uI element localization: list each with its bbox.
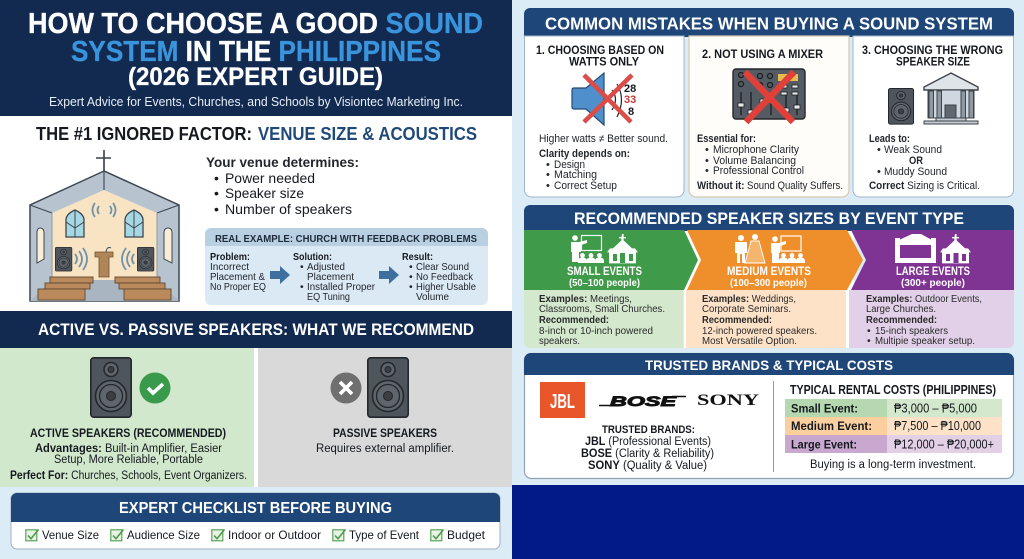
mistake 1 text: Matching xyxy=(554,169,597,181)
active speakers text: Advantages: Built-in Amplifier, Easier xyxy=(35,443,222,455)
example: result: Higher Usable xyxy=(416,281,476,293)
text block: venue determines: Power needed xyxy=(225,170,315,186)
icon: crossed-out loudspeaker: 33 xyxy=(624,94,636,106)
mistake 2 text: Without it: Sound Quality Suffers. xyxy=(697,180,843,192)
panel: title banner xyxy=(0,0,512,116)
table: typical rental costs: ₱7,500 – ₱10,000 xyxy=(894,419,981,433)
icon: crossed-out loudspeaker xyxy=(572,73,636,125)
active speakers text: ACTIVE SPEAKERS (RECOMMENDED) xyxy=(30,426,226,440)
text block: venue determines: • xyxy=(214,201,219,217)
mistake 2 text: • xyxy=(705,165,709,177)
mistake 1 text: Design xyxy=(554,159,585,171)
heading: recommended sizes: RECOMMENDED SPEAKER SIZES BY EVENT TYPE xyxy=(574,209,964,228)
icon: wedding couple and seminar xyxy=(735,234,805,263)
table: typical rental costs: ₱12,000 – ₱20,000+ xyxy=(894,438,994,452)
card: mistake 3 xyxy=(853,36,1014,197)
mistake 2 text: • xyxy=(705,155,709,167)
mistake 1 text: Clarity depends on: xyxy=(539,148,630,160)
large events text xyxy=(866,293,982,347)
text block: trusted brands list: SONY (Quality & Value) xyxy=(588,460,707,472)
example: problem: Incorrect xyxy=(210,261,249,273)
card: mistake 3: SPEAKER SIZE xyxy=(896,54,970,68)
example: result: • xyxy=(409,271,413,283)
table: typical rental costs: Large Event: xyxy=(791,438,857,452)
icon: church interior xyxy=(30,150,179,301)
example: result: • xyxy=(409,261,413,273)
checklist items: Indoor or Outdoor xyxy=(228,528,321,542)
large events text: 15-inch speakers xyxy=(875,325,948,337)
mistake 3 text: • xyxy=(877,166,881,178)
example: problem: Placement & xyxy=(210,271,265,283)
column: large events xyxy=(849,230,1014,348)
panel: active speakers xyxy=(0,348,254,487)
table: typical rental costs xyxy=(785,383,1002,471)
example: result: • xyxy=(409,281,413,293)
icon: check mark xyxy=(140,372,170,404)
large events text: Recommended: xyxy=(866,314,937,326)
large events text: • xyxy=(867,325,871,337)
logo: BOSE: BOSE xyxy=(610,393,677,409)
mistake 3 text: Leads to: xyxy=(869,133,910,145)
mistake 1 text: • xyxy=(546,159,550,171)
panel: venue size and acoustics xyxy=(30,124,488,305)
table: typical rental costs: Small Event: xyxy=(791,402,858,416)
medium events text: Recommended: xyxy=(702,314,772,326)
mistake 1 text xyxy=(539,133,668,192)
card: mistake 2: 2. NOT USING A MIXER xyxy=(702,47,823,61)
large events text: • xyxy=(867,335,871,347)
checklist items: Venue Size xyxy=(42,528,99,542)
mistake 2 text: Essential for: xyxy=(697,133,756,145)
mistake 1 text: Correct Setup xyxy=(554,180,617,192)
column: small events xyxy=(524,230,698,348)
icon: active speaker xyxy=(91,358,131,417)
checklist items: Type of Event xyxy=(349,528,420,542)
mistake 2 text: Microphone Clarity xyxy=(713,144,799,156)
small events text: Recommended: xyxy=(539,314,609,326)
mistake 1 text: • xyxy=(546,169,550,181)
text block: venue determines: Your venue determines: xyxy=(206,155,359,170)
table: typical rental costs: Buying is a long-term investment. xyxy=(810,459,976,471)
mistake 3 text: Weak Sound xyxy=(884,144,942,156)
medium events text: Most Versatile Option. xyxy=(702,335,797,347)
right column background xyxy=(512,0,1024,485)
small events text: Classrooms, Small Churches. xyxy=(539,303,665,315)
column: large events: (300+ people) xyxy=(901,277,965,289)
column: large events: LARGE EVENTS xyxy=(896,266,970,278)
medium events text xyxy=(702,293,817,347)
panel: recommended speaker sizes xyxy=(524,205,1014,348)
column: medium events xyxy=(686,230,863,348)
passive speakers text: PASSIVE SPEAKERS xyxy=(333,426,437,440)
heading: ignored factor xyxy=(36,124,477,144)
passive speakers text: Requires external amplifier. xyxy=(316,443,454,455)
mistake 2 text: Volume Balancing xyxy=(713,155,796,167)
title line 2: SYSTEM IN THE PHILIPPINES xyxy=(71,36,441,68)
example: result: Clear Sound xyxy=(416,261,469,273)
card: mistake 1: 1. CHOOSING BASED ON xyxy=(536,43,664,57)
mistake 3 text: Correct Sizing is Critical. xyxy=(869,180,980,192)
small events text: Examples: Meetings, xyxy=(539,293,632,305)
example: solution: EQ Tuning xyxy=(307,291,350,303)
card: mistake 3: 3. CHOOSING THE WRONG xyxy=(862,43,1003,57)
large events text: Large Churches. xyxy=(866,303,936,315)
panel: trusted brands and costs xyxy=(524,353,1014,478)
text block: trusted brands list xyxy=(581,424,714,472)
example: problem xyxy=(210,251,266,293)
navy footer block xyxy=(512,485,1024,559)
example: solution: Solution: xyxy=(293,251,332,263)
logo: SONY: SONY xyxy=(697,392,759,409)
column: small events: SMALL EVENTS xyxy=(567,266,642,278)
subtitle: Expert Advice for Events, Churches, and Schools by Visiontec Marketing Inc. xyxy=(49,95,463,109)
heading: active vs passive: ACTIVE VS. PASSIVE SPEAKERS: WHAT WE RECOMMEND xyxy=(38,321,474,339)
table: typical rental costs: Medium Event: xyxy=(791,419,872,433)
column: medium events: (100–300 people) xyxy=(730,277,807,289)
arrow: problem to solution xyxy=(270,266,290,284)
medium events text: Corporate Seminars. xyxy=(702,303,791,315)
example: result xyxy=(402,251,476,303)
table: typical rental costs: ₱3,000 – ₱5,000 xyxy=(894,402,977,416)
text block: venue determines: • xyxy=(214,185,219,201)
mistake 3 text: • xyxy=(877,144,881,156)
example: result: No Feedback xyxy=(416,271,474,283)
medium events text: Examples: Weddings, xyxy=(702,293,796,305)
column: small events: (50–100 people) xyxy=(569,277,640,289)
example: solution: Adjusted xyxy=(307,261,345,273)
active speakers text xyxy=(10,426,247,482)
small events text xyxy=(539,293,665,347)
title line 1: HOW TO CHOOSE A GOOD SOUND xyxy=(28,8,483,40)
example: solution: Placement xyxy=(307,271,354,283)
card: mistake 1 xyxy=(524,36,684,197)
example: problem: No Proper EQ xyxy=(210,281,266,293)
small events text: speakers. xyxy=(539,335,580,347)
icon: crossed-out loudspeaker: 8 xyxy=(628,106,634,118)
checklist items xyxy=(26,528,486,542)
mistake 1 text: • xyxy=(546,180,550,192)
panel: expert checklist xyxy=(11,493,500,549)
large events text: Examples: Outdoor Events, xyxy=(866,293,982,305)
icon: cross mark xyxy=(330,372,362,404)
mistake 3 text: OR xyxy=(909,155,923,167)
text block: venue determines: • xyxy=(214,170,219,186)
icon: classroom and chapel xyxy=(571,234,638,263)
heading: common mistakes: COMMON MISTAKES WHEN BUYING A SOUND SYSTEM xyxy=(545,14,993,34)
callout: real example: REAL EXAMPLE: CHURCH WITH FEEDBACK PROBLEMS xyxy=(215,233,477,245)
example: solution: Installed Proper xyxy=(307,281,375,293)
text block: trusted brands list: JBL (Professional Events) xyxy=(585,436,711,448)
card: mistake 1: WATTS ONLY xyxy=(569,54,639,68)
active speakers text: Setup, More Reliable, Portable xyxy=(54,454,203,466)
example: result: Volume xyxy=(416,291,449,303)
panel: active vs passive speakers xyxy=(0,311,512,487)
icon: speaker beside large building xyxy=(888,73,978,124)
example: problem: Problem: xyxy=(210,251,250,263)
mistake 2 text xyxy=(697,133,843,192)
checklist items: Audience Size xyxy=(127,528,200,542)
example: solution: • xyxy=(300,261,304,273)
icon: passive speaker xyxy=(368,358,408,417)
icon: stage and church xyxy=(895,234,971,263)
panel: passive speakers xyxy=(258,348,512,487)
checklist background xyxy=(0,487,512,559)
checklist items: Budget xyxy=(447,528,486,542)
heading: ignored factor: VENUE SIZE & ACOUSTICS xyxy=(258,124,477,144)
logo: JBL xyxy=(540,382,585,418)
title line 3: (2026 EXPERT GUIDE) xyxy=(128,63,383,91)
icon: crossed-out loudspeaker: 28 xyxy=(624,83,636,95)
example: result: Result: xyxy=(402,251,433,263)
text block: venue determines: Speaker size xyxy=(225,185,304,201)
arrow: solution to result xyxy=(379,266,399,284)
mistake 2 text: • xyxy=(705,144,709,156)
card: mistake 2 xyxy=(689,36,849,197)
heading: ignored factor: THE #1 IGNORED FACTOR: xyxy=(36,124,252,144)
large events text: Multipie speaker setup. xyxy=(875,335,975,347)
panel: common mistakes xyxy=(524,8,1014,197)
logo: JBL: JBL xyxy=(550,391,575,413)
small events text: 8-inch or 10-inch powered xyxy=(539,325,653,337)
passive speakers text xyxy=(316,426,454,455)
active speakers text: Perfect For: Churches, Schools, Event Organizers. xyxy=(10,470,247,482)
text block: trusted brands list: BOSE (Clarity & Reliability) xyxy=(581,448,714,460)
column: medium events: MEDIUM EVENTS xyxy=(727,266,811,278)
text block: venue determines xyxy=(206,155,359,217)
logo: BOSE xyxy=(599,393,686,409)
callout: real example xyxy=(205,228,488,305)
heading: trusted brands: TRUSTED BRANDS & TYPICAL COSTS xyxy=(645,357,893,373)
example: solution: • xyxy=(300,281,304,293)
example: solution xyxy=(293,251,375,303)
mistake 3 text xyxy=(869,133,980,192)
medium events text: 12-inch powered speakers. xyxy=(702,325,817,337)
heading: checklist: EXPERT CHECKLIST BEFORE BUYING xyxy=(119,500,392,517)
mistake 1 text: Higher watts ≠ Better sound. xyxy=(539,133,668,145)
mistake 2 text: Professional Control xyxy=(713,165,804,177)
text block: trusted brands list: TRUSTED BRANDS: xyxy=(602,424,695,436)
text block: venue determines: Number of speakers xyxy=(225,201,352,217)
mistake 3 text: Muddy Sound xyxy=(884,166,947,178)
icon: crossed-out mixer xyxy=(733,69,805,122)
